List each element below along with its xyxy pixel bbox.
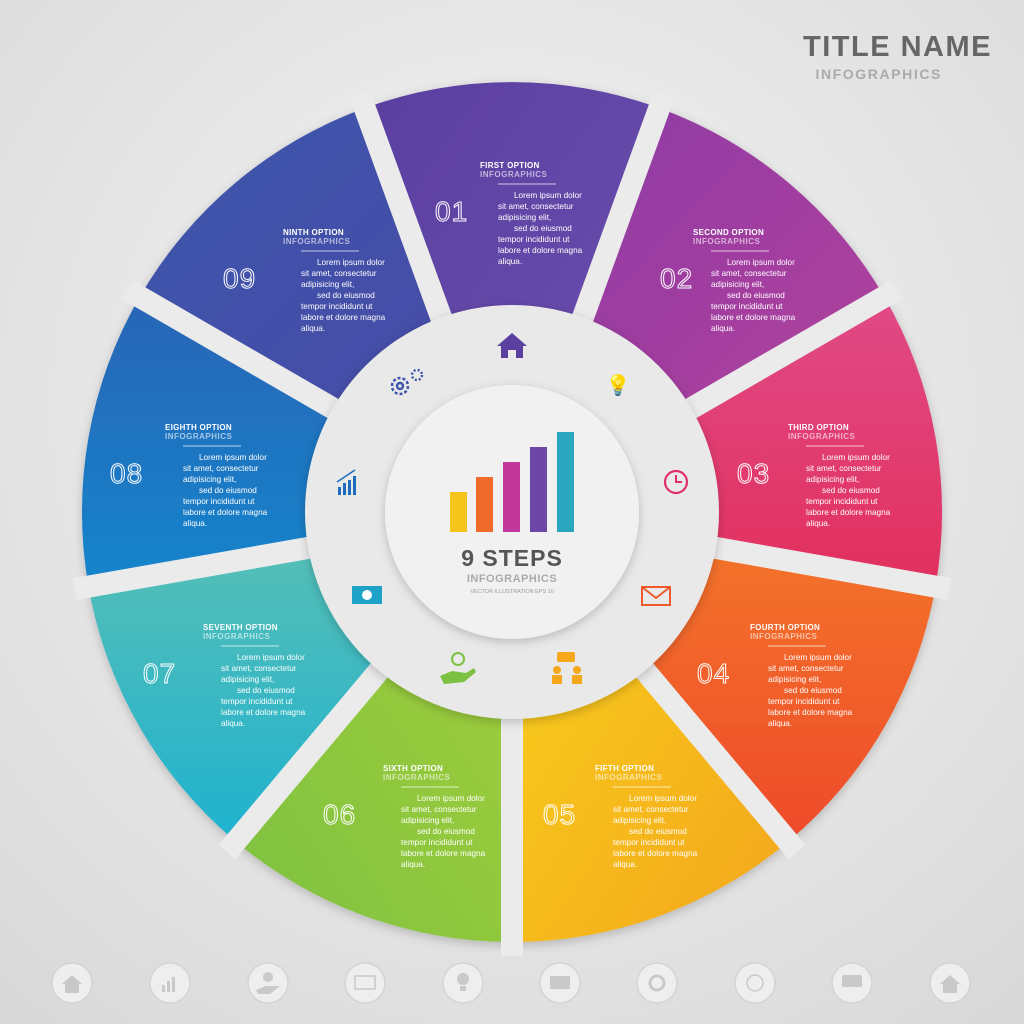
- icon: gears: [392, 370, 422, 394]
- block 03: [737, 423, 891, 528]
- cycle wheel: [82, 82, 942, 942]
- block 06: [323, 764, 486, 869]
- block 02: [660, 228, 796, 333]
- center disc: 9 STEPS: [461, 545, 563, 571]
- center disc: VECTOR ILLUSTRATION EPS 10: [470, 589, 554, 595]
- text blocks: [110, 161, 891, 869]
- block 07: 07: [143, 658, 176, 689]
- block 08: EIGHTH OPTION: [165, 423, 232, 432]
- icon: bulb: 💡: [606, 373, 630, 397]
- block 03: 03: [737, 458, 770, 489]
- segment 02: [512, 108, 884, 512]
- block 08: [110, 423, 268, 528]
- icon ring: [305, 305, 719, 719]
- block 03: THIRD OPTION: [788, 423, 849, 432]
- center disc: INFOGRAPHICS: [467, 573, 557, 585]
- icon: home: [497, 333, 527, 358]
- block 01: [435, 161, 583, 266]
- bottom icon row: [52, 963, 970, 1003]
- segment 04: [512, 512, 936, 841]
- block 04: FOURTH OPTION: [750, 623, 820, 632]
- bar chart: [450, 432, 574, 532]
- block 04: [697, 623, 853, 728]
- icon: people: [552, 652, 582, 684]
- block 08: 08: [110, 458, 143, 489]
- block 02: SECOND OPTION: [693, 228, 764, 237]
- block 09: [223, 228, 386, 333]
- segment 09: [140, 108, 512, 512]
- block 07: SEVENTH OPTION: [203, 623, 278, 632]
- segment 08: [82, 297, 512, 587]
- segment 05: [512, 512, 788, 942]
- block 05: FIFTH OPTION: [595, 764, 654, 773]
- block 05: 05: [543, 799, 576, 830]
- segment 03: [512, 297, 942, 587]
- title: INFOGRAPHICS: [815, 66, 942, 82]
- block 09: 09: [223, 263, 256, 294]
- icon: clock: [665, 471, 687, 493]
- icon: hand coin: [440, 653, 476, 684]
- title: [803, 31, 992, 82]
- block 02: 02: [660, 263, 693, 294]
- title: TITLE NAME: [803, 31, 992, 63]
- segment 01: [365, 82, 659, 512]
- ring icons: [337, 333, 687, 684]
- block 07: [143, 623, 306, 728]
- icon: money: [352, 586, 382, 604]
- block 01: 01: [435, 196, 468, 227]
- block 05: [543, 764, 698, 869]
- block 09: NINTH OPTION: [283, 228, 344, 237]
- icon: mail: [642, 587, 670, 605]
- block 01: FIRST OPTION: [480, 161, 540, 170]
- segment 06: [236, 512, 512, 942]
- block 06: SIXTH OPTION: [383, 764, 443, 773]
- block 06: 06: [323, 799, 356, 830]
- segment 07: [88, 512, 512, 841]
- center disc: [385, 385, 639, 639]
- block 04: 04: [697, 658, 730, 689]
- icon: chart: [337, 470, 356, 495]
